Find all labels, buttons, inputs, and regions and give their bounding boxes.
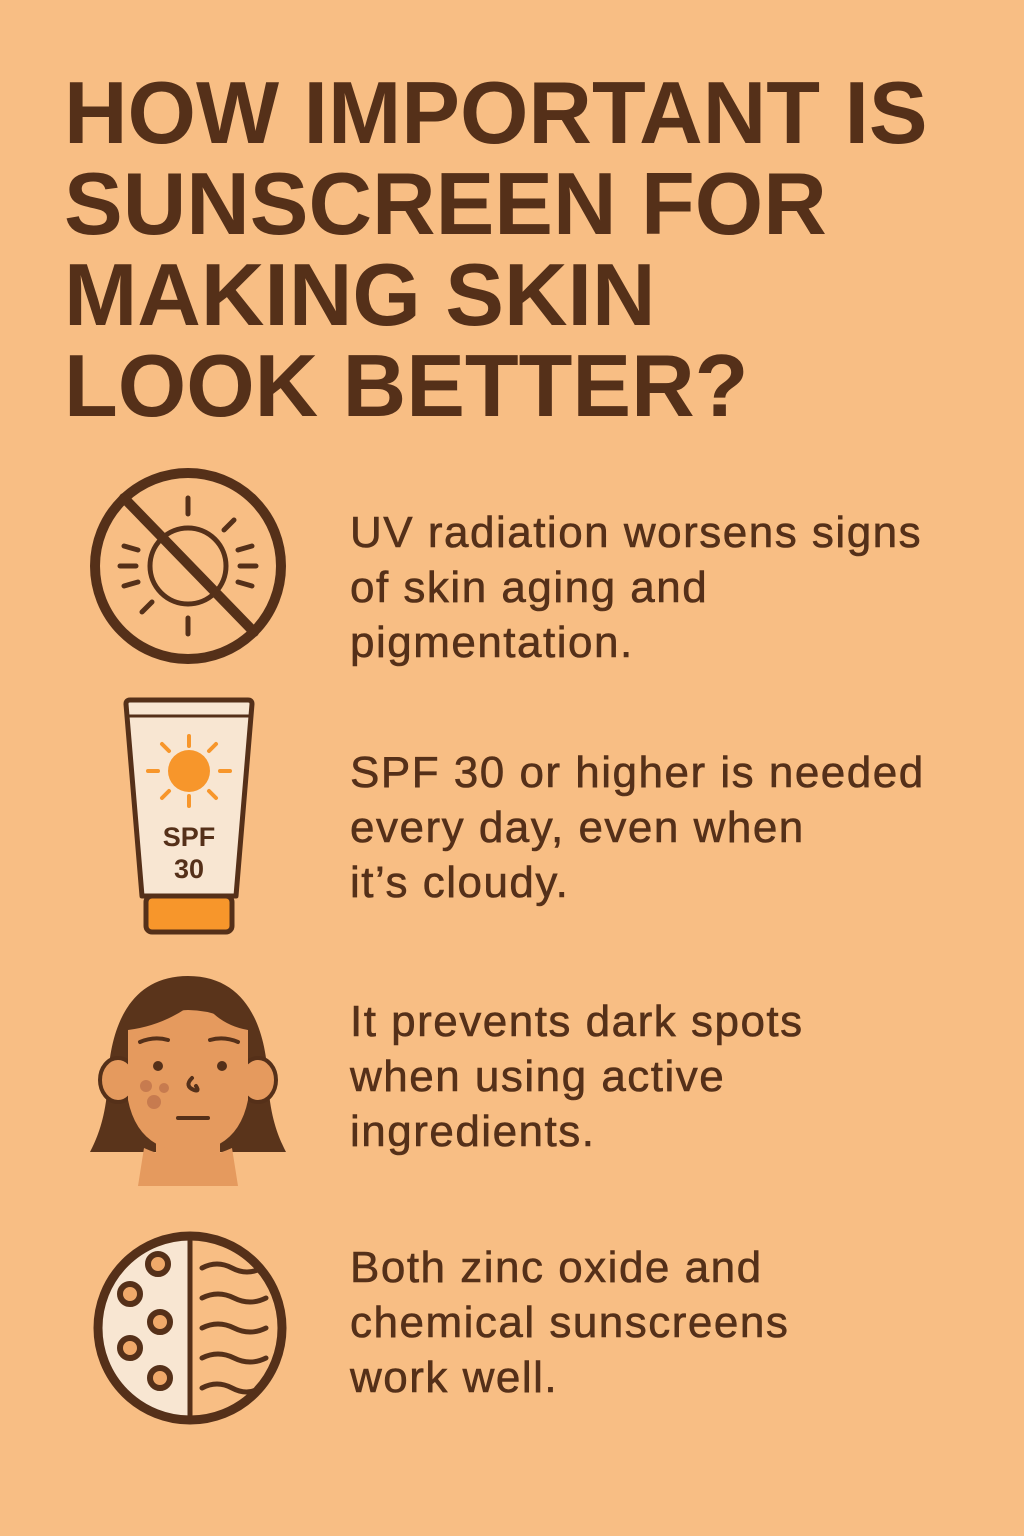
- text: UV radiation: UV radiation worsens signs: [350, 508, 922, 557]
- text: UV radiation: [350, 508, 922, 667]
- text: dark spots: It prevents dark spots: [350, 997, 804, 1046]
- text: zinc oxide: [350, 1243, 789, 1402]
- icon: face with spots: [90, 976, 286, 1186]
- icon: SPF tube: SPF: [163, 822, 215, 852]
- text: zinc oxide: Both zinc oxide and: [350, 1243, 763, 1292]
- icon: SPF tube: 30: [174, 854, 204, 884]
- title: SUNSCREEN FOR: [64, 154, 827, 253]
- text: SPF 30: it’s cloudy.: [350, 858, 569, 907]
- title: LOOK BETTER?: [64, 336, 748, 435]
- title: MAKING SKIN: [64, 245, 656, 344]
- icon: zinc vs chemical: [94, 1232, 286, 1424]
- text: dark spots: [350, 997, 804, 1156]
- text: SPF 30: every day, even when: [350, 803, 805, 852]
- text: UV radiation: of skin aging and: [350, 563, 708, 612]
- text: zinc oxide: chemical sunscreens: [350, 1298, 789, 1347]
- title: HOW IMPORTANT IS: [64, 63, 928, 162]
- text: dark spots: ingredients.: [350, 1107, 595, 1156]
- title: [64, 63, 928, 435]
- icon: SPF tube: [124, 698, 254, 934]
- icon: no sun: [90, 468, 286, 664]
- text: dark spots: when using active: [350, 1052, 725, 1101]
- text: SPF 30: SPF 30 or higher is needed: [350, 748, 925, 797]
- text: SPF 30: [350, 748, 925, 907]
- text: zinc oxide: work well.: [350, 1353, 558, 1402]
- text: UV radiation: pigmentation.: [350, 618, 634, 667]
